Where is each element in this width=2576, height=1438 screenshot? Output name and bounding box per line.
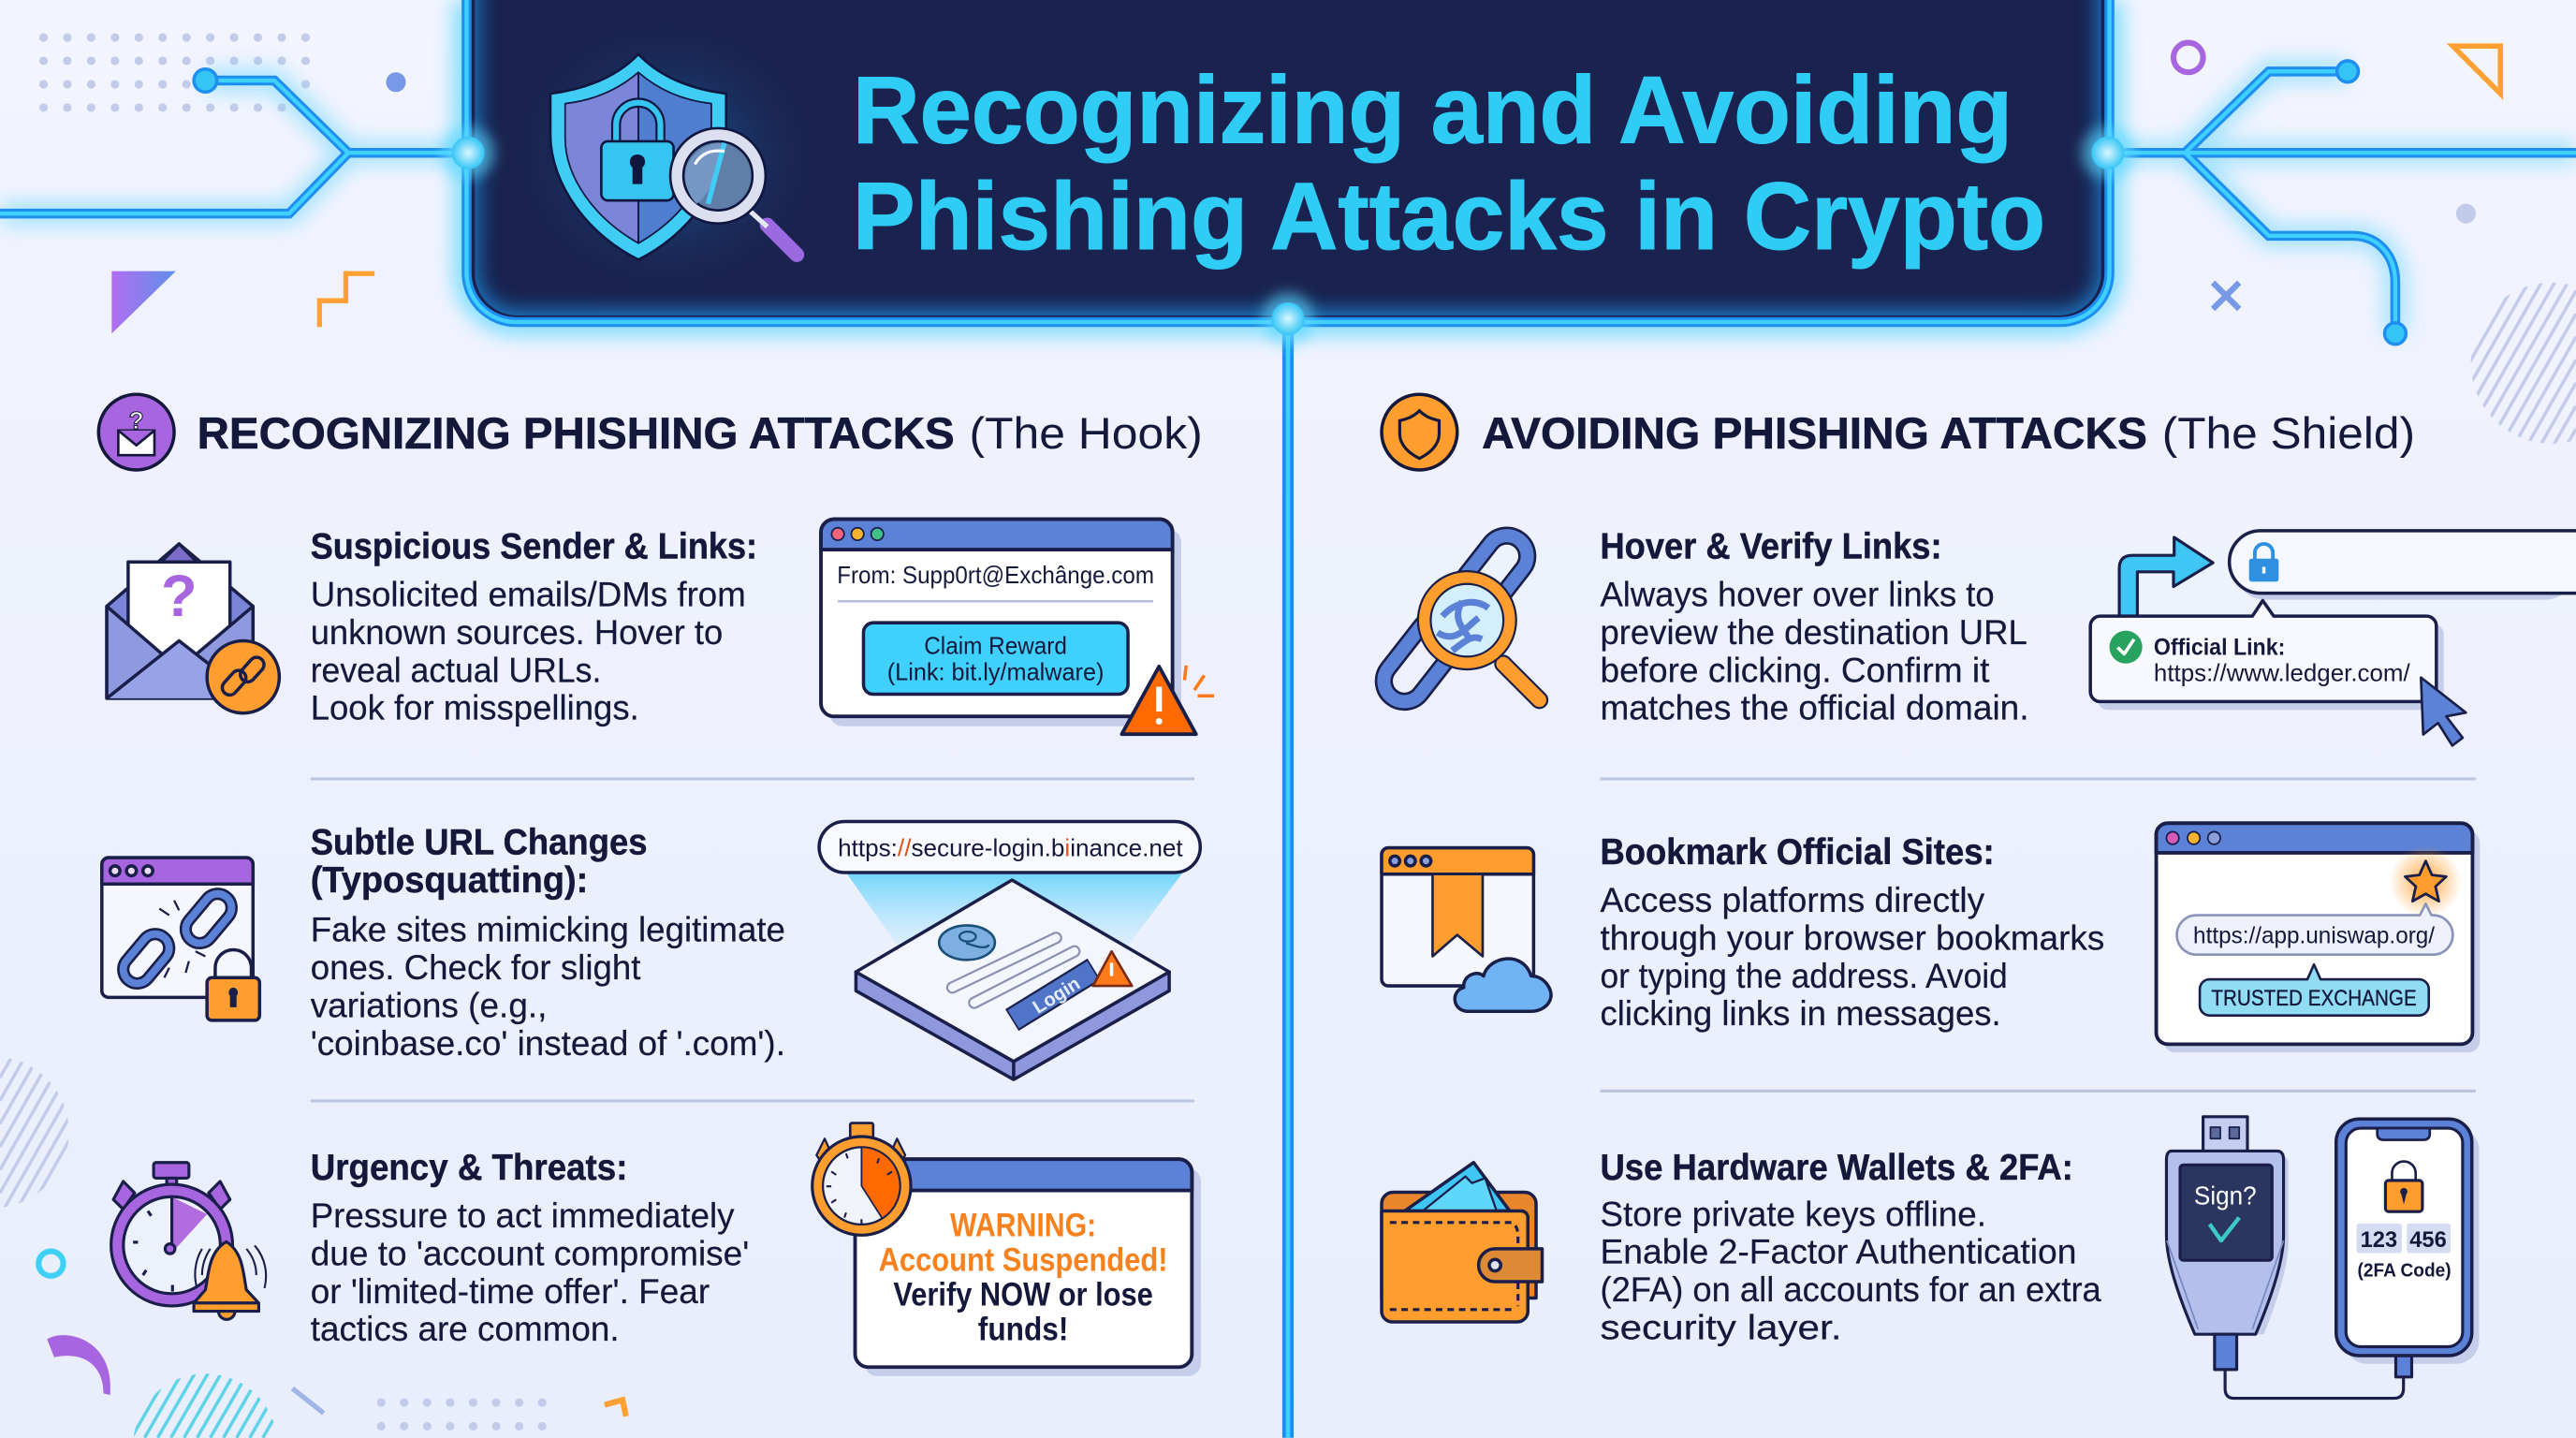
divider bbox=[1600, 1090, 2476, 1092]
illustration: account suspended warning: Verify NOW or lose bbox=[893, 1276, 1153, 1313]
text block: urgency: or 'limited-time offer'. Fear bbox=[311, 1272, 710, 1311]
icon: stopwatch and bell bbox=[111, 1163, 266, 1319]
illustration: hardware wallet and phone 2FA: 123 bbox=[2361, 1228, 2397, 1253]
section icon: envelope bbox=[98, 394, 174, 470]
text block: hardware wallets: security layer. bbox=[1600, 1308, 1841, 1346]
text block: urgency: tactics are common. bbox=[311, 1310, 620, 1348]
text block: subtle URL changes: 'coinbase.co' instead of '.com'). bbox=[311, 1024, 785, 1063]
illustration: hardware wallet and phone 2FA bbox=[2166, 1117, 2479, 1399]
decorative shapes top left bbox=[111, 72, 406, 333]
text block: hover and verify: matches the official domain. bbox=[1600, 689, 2029, 727]
illustration: hardware wallet and phone 2FA: (2FA Code) bbox=[2358, 1261, 2452, 1282]
text block: hover and verify: Hover & Verify Links: bbox=[1600, 527, 1942, 567]
decorative shapes bottom left bbox=[38, 1252, 626, 1416]
icon: envelope with link bbox=[107, 544, 279, 713]
text block: hardware wallets bbox=[1600, 1148, 2101, 1346]
text block: subtle URL changes: variations (e.g., bbox=[311, 986, 547, 1024]
illustration: phishing email window: Claim Reward bbox=[924, 634, 1067, 660]
illustration: account suspended warning: Account Suspended! bbox=[879, 1242, 1168, 1279]
illustration: typosquatted URL and fake login bbox=[819, 822, 1200, 1079]
text block: urgency: due to 'account compromise' bbox=[311, 1234, 749, 1272]
striped circle right bbox=[2471, 283, 2576, 444]
text block: suspicious sender: unknown sources. Hover to bbox=[311, 613, 723, 652]
text block: suspicious sender bbox=[311, 527, 757, 727]
illustration: trusted bookmark window: https://app.uniswap.org/ bbox=[2193, 923, 2435, 948]
decorative dot grid bottom bbox=[377, 1399, 547, 1431]
text block: hover and verify bbox=[1600, 527, 2029, 727]
text block: subtle URL changes: (Typosquatting): bbox=[311, 860, 588, 901]
illustration: trusted bookmark window: TRUSTED EXCHANGE bbox=[2211, 987, 2417, 1011]
illustration: official link tooltip: https://www.ledger.com/ bbox=[2154, 660, 2411, 686]
text block: subtle URL changes: Subtle URL Changes bbox=[311, 823, 648, 863]
section icon: shield bbox=[1382, 394, 1457, 470]
text block: suspicious sender: Suspicious Sender & Links: bbox=[311, 527, 757, 567]
text block: subtle URL changes bbox=[311, 823, 785, 1063]
text block: bookmark: Access platforms directly bbox=[1600, 881, 1985, 919]
text block: bookmark: or typing the address. Avoid bbox=[1600, 957, 2008, 995]
glow nodes bbox=[442, 126, 2134, 345]
centre divider line bbox=[1283, 318, 1293, 1438]
text block: hover and verify: Always hover over links to bbox=[1600, 576, 1995, 614]
icon: envelope with link: ? bbox=[161, 564, 198, 629]
circuit lines right bbox=[2108, 61, 2576, 345]
section icon: envelope: ? bbox=[129, 406, 144, 434]
title: Recognizing and Avoiding bbox=[853, 57, 2012, 164]
icon: bookmark window with cloud bbox=[1382, 848, 1551, 1011]
text block: hover and verify: before clicking. Confirm it bbox=[1600, 651, 1989, 689]
text block: hover and verify: preview the destination URL bbox=[1600, 613, 2027, 652]
icon: wallet bbox=[1382, 1163, 1543, 1322]
divider bbox=[311, 1100, 1194, 1102]
striped circle left bbox=[0, 1058, 69, 1208]
icon: broken chain window with lock bbox=[102, 858, 259, 1020]
illustration: trusted bookmark window bbox=[2157, 823, 2480, 1052]
text block: suspicious sender: Look for misspellings. bbox=[311, 689, 639, 727]
heading: avoiding: AVOIDING PHISHING ATTACKS bbox=[1482, 409, 2147, 459]
striped circle bottom bbox=[133, 1373, 273, 1438]
title: Phishing Attacks in Crypto bbox=[853, 163, 2045, 270]
illustration: phishing email window: From: Supp0rt@Exchânge.com bbox=[837, 563, 1154, 589]
illustration: typosquatted URL and fake login: Login bbox=[1030, 974, 1084, 1019]
text block: bookmark: Bookmark Official Sites: bbox=[1600, 832, 1995, 873]
illustration: official link tooltip bbox=[2090, 531, 2576, 745]
text block: hardware wallets: Store private keys offline. bbox=[1600, 1195, 1986, 1233]
circuit lines left bbox=[0, 69, 468, 213]
decorative shapes top right bbox=[2174, 43, 2500, 309]
divider bbox=[311, 778, 1194, 780]
text block: hardware wallets: Use Hardware Wallets & 2FA: bbox=[1600, 1148, 2073, 1188]
text block: urgency bbox=[311, 1148, 749, 1348]
title bbox=[853, 57, 2045, 270]
illustration: account suspended warning: funds! bbox=[978, 1311, 1068, 1347]
illustration: phishing email window bbox=[821, 520, 1214, 734]
icon: chain under magnifier bbox=[1376, 527, 1540, 710]
heading: avoiding: (The Shield) bbox=[2162, 409, 2415, 459]
decorative dot grid top left bbox=[39, 33, 310, 112]
text block: bookmark: through your browser bookmarks bbox=[1600, 918, 2104, 957]
text block: bookmark bbox=[1600, 832, 2104, 1033]
text block: bookmark: clicking links in messages. bbox=[1600, 994, 2001, 1033]
illustration: account suspended warning: WARNING: bbox=[950, 1208, 1096, 1244]
illustration: hardware wallet and phone 2FA: Sign? bbox=[2194, 1181, 2257, 1210]
illustration: phishing email window: (Link: bit.ly/malware) bbox=[887, 660, 1104, 686]
text block: urgency: Urgency & Threats: bbox=[311, 1148, 627, 1188]
title panel bbox=[466, 0, 2110, 322]
text block: urgency: Pressure to act immediately bbox=[311, 1196, 735, 1235]
illustration: typosquatted URL and fake login: https://secure-login.b iinance.net bbox=[838, 835, 1183, 861]
divider bbox=[1600, 778, 2476, 780]
text block: hardware wallets: (2FA) on all accounts for an extra bbox=[1600, 1270, 2101, 1309]
text block: hardware wallets: Enable 2-Factor Authentication bbox=[1600, 1233, 2076, 1271]
text block: suspicious sender: Unsolicited emails/DMs from bbox=[311, 576, 746, 614]
heading: recognizing: RECOGNIZING PHISHING ATTACKS bbox=[198, 409, 955, 459]
illustration: account suspended warning bbox=[812, 1123, 1201, 1376]
icon: shield with lock and magnifier bbox=[550, 54, 797, 259]
text block: subtle URL changes: ones. Check for slight bbox=[311, 948, 640, 987]
illustration: hardware wallet and phone 2FA: 456 bbox=[2409, 1228, 2447, 1253]
illustration: official link tooltip: Official Link: bbox=[2154, 635, 2285, 660]
text block: subtle URL changes: Fake sites mimicking legitimate bbox=[311, 911, 785, 949]
heading: recognizing: (The Hook) bbox=[970, 409, 1203, 459]
text block: suspicious sender: reveal actual URLs. bbox=[311, 651, 601, 689]
